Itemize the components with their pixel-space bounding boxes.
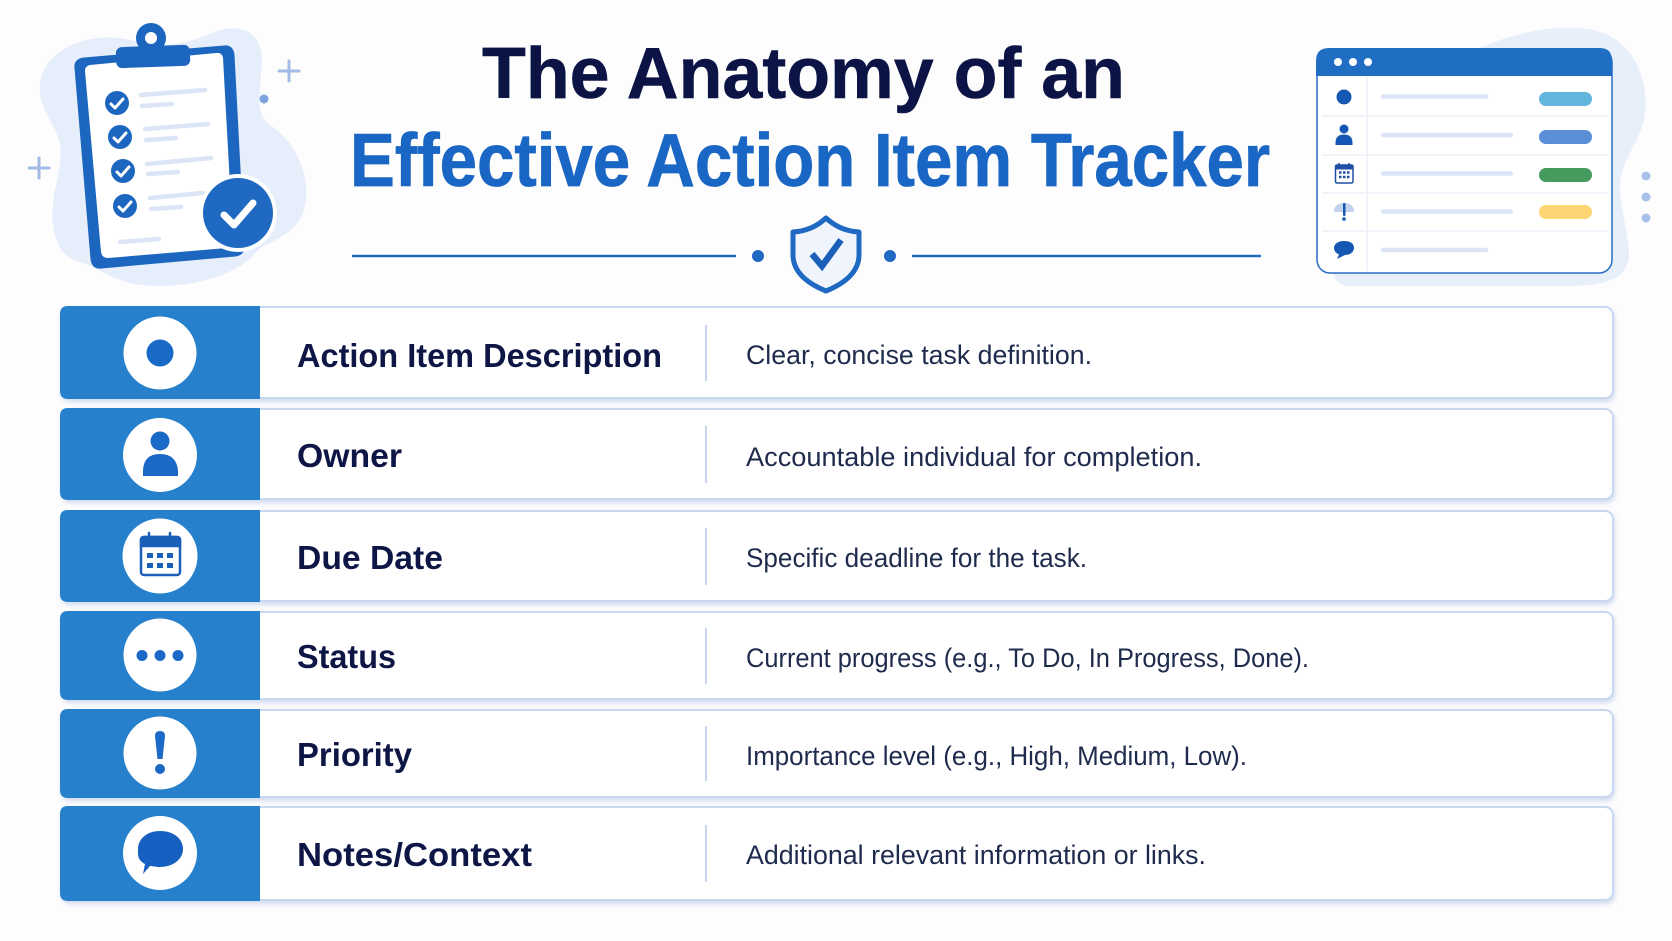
row placeholder lines bbox=[1383, 96, 1511, 250]
title line 1: The Anatomy of an bbox=[482, 34, 1125, 114]
decorative plus and dot marks bbox=[29, 61, 299, 178]
label: Status bbox=[297, 638, 396, 675]
clipboard board bbox=[76, 47, 243, 267]
icon: speech bubble bbox=[123, 816, 197, 890]
icon tab bbox=[60, 709, 260, 798]
description: Clear, concise task definition. bbox=[746, 340, 1092, 370]
status pills bbox=[1539, 92, 1592, 219]
icon tab bbox=[60, 806, 260, 901]
label: Due Date bbox=[297, 539, 443, 576]
window background blob bbox=[1333, 28, 1646, 286]
title bbox=[350, 34, 1270, 202]
icon: ellipsis bbox=[124, 618, 196, 692]
row: Status bbox=[60, 611, 1613, 700]
row: Due Date bbox=[60, 510, 1613, 602]
checklist lines bbox=[120, 90, 211, 242]
illustration: tracker window bbox=[1316, 28, 1650, 286]
row panel bbox=[61, 710, 1613, 797]
row panel bbox=[61, 807, 1613, 900]
row panel bbox=[61, 307, 1613, 398]
window title bar bbox=[1316, 48, 1612, 76]
row: Owner bbox=[60, 408, 1613, 500]
label: Action Item Description bbox=[297, 337, 662, 374]
row: Priority bbox=[60, 709, 1613, 798]
description: Additional relevant information or links. bbox=[746, 840, 1206, 870]
title divider with shield bbox=[352, 218, 1261, 291]
window controls bbox=[1334, 58, 1372, 66]
description: Accountable individual for completion. bbox=[746, 442, 1202, 472]
large check badge bbox=[199, 174, 277, 252]
row panel bbox=[61, 612, 1613, 699]
icon tab bbox=[60, 611, 260, 700]
label: Notes/Context bbox=[297, 836, 532, 873]
window frame bbox=[1317, 49, 1612, 273]
title line 2: Effective Action Item Tracker bbox=[350, 118, 1270, 202]
row: Action Item Description bbox=[60, 306, 1613, 399]
description: Importance level (e.g., High, Medium, Low). bbox=[746, 741, 1247, 771]
description: Current progress (e.g., To Do, In Progress, Done). bbox=[746, 643, 1309, 673]
row: Notes/Context bbox=[60, 806, 1613, 901]
illustration: clipboard bbox=[29, 23, 306, 286]
row panel bbox=[61, 511, 1613, 601]
icon: person bbox=[123, 418, 197, 492]
icon: exclamation bbox=[124, 716, 196, 790]
icon tab bbox=[60, 408, 260, 500]
icon: dot bbox=[124, 316, 196, 390]
clipboard clip bbox=[116, 23, 190, 68]
label: Owner bbox=[297, 437, 402, 474]
icon tab bbox=[60, 306, 260, 399]
icon: shield check bbox=[793, 218, 859, 291]
decorative dots bbox=[1642, 172, 1650, 222]
icon tab bbox=[60, 510, 260, 602]
clipboard paper bbox=[85, 53, 233, 258]
window row icons bbox=[1334, 90, 1354, 259]
label: Priority bbox=[297, 736, 413, 773]
icon: calendar bbox=[122, 518, 198, 594]
clipboard background blob bbox=[40, 28, 306, 286]
checklist marks bbox=[105, 91, 137, 218]
row panel bbox=[61, 409, 1613, 499]
description: Specific deadline for the task. bbox=[746, 543, 1087, 573]
